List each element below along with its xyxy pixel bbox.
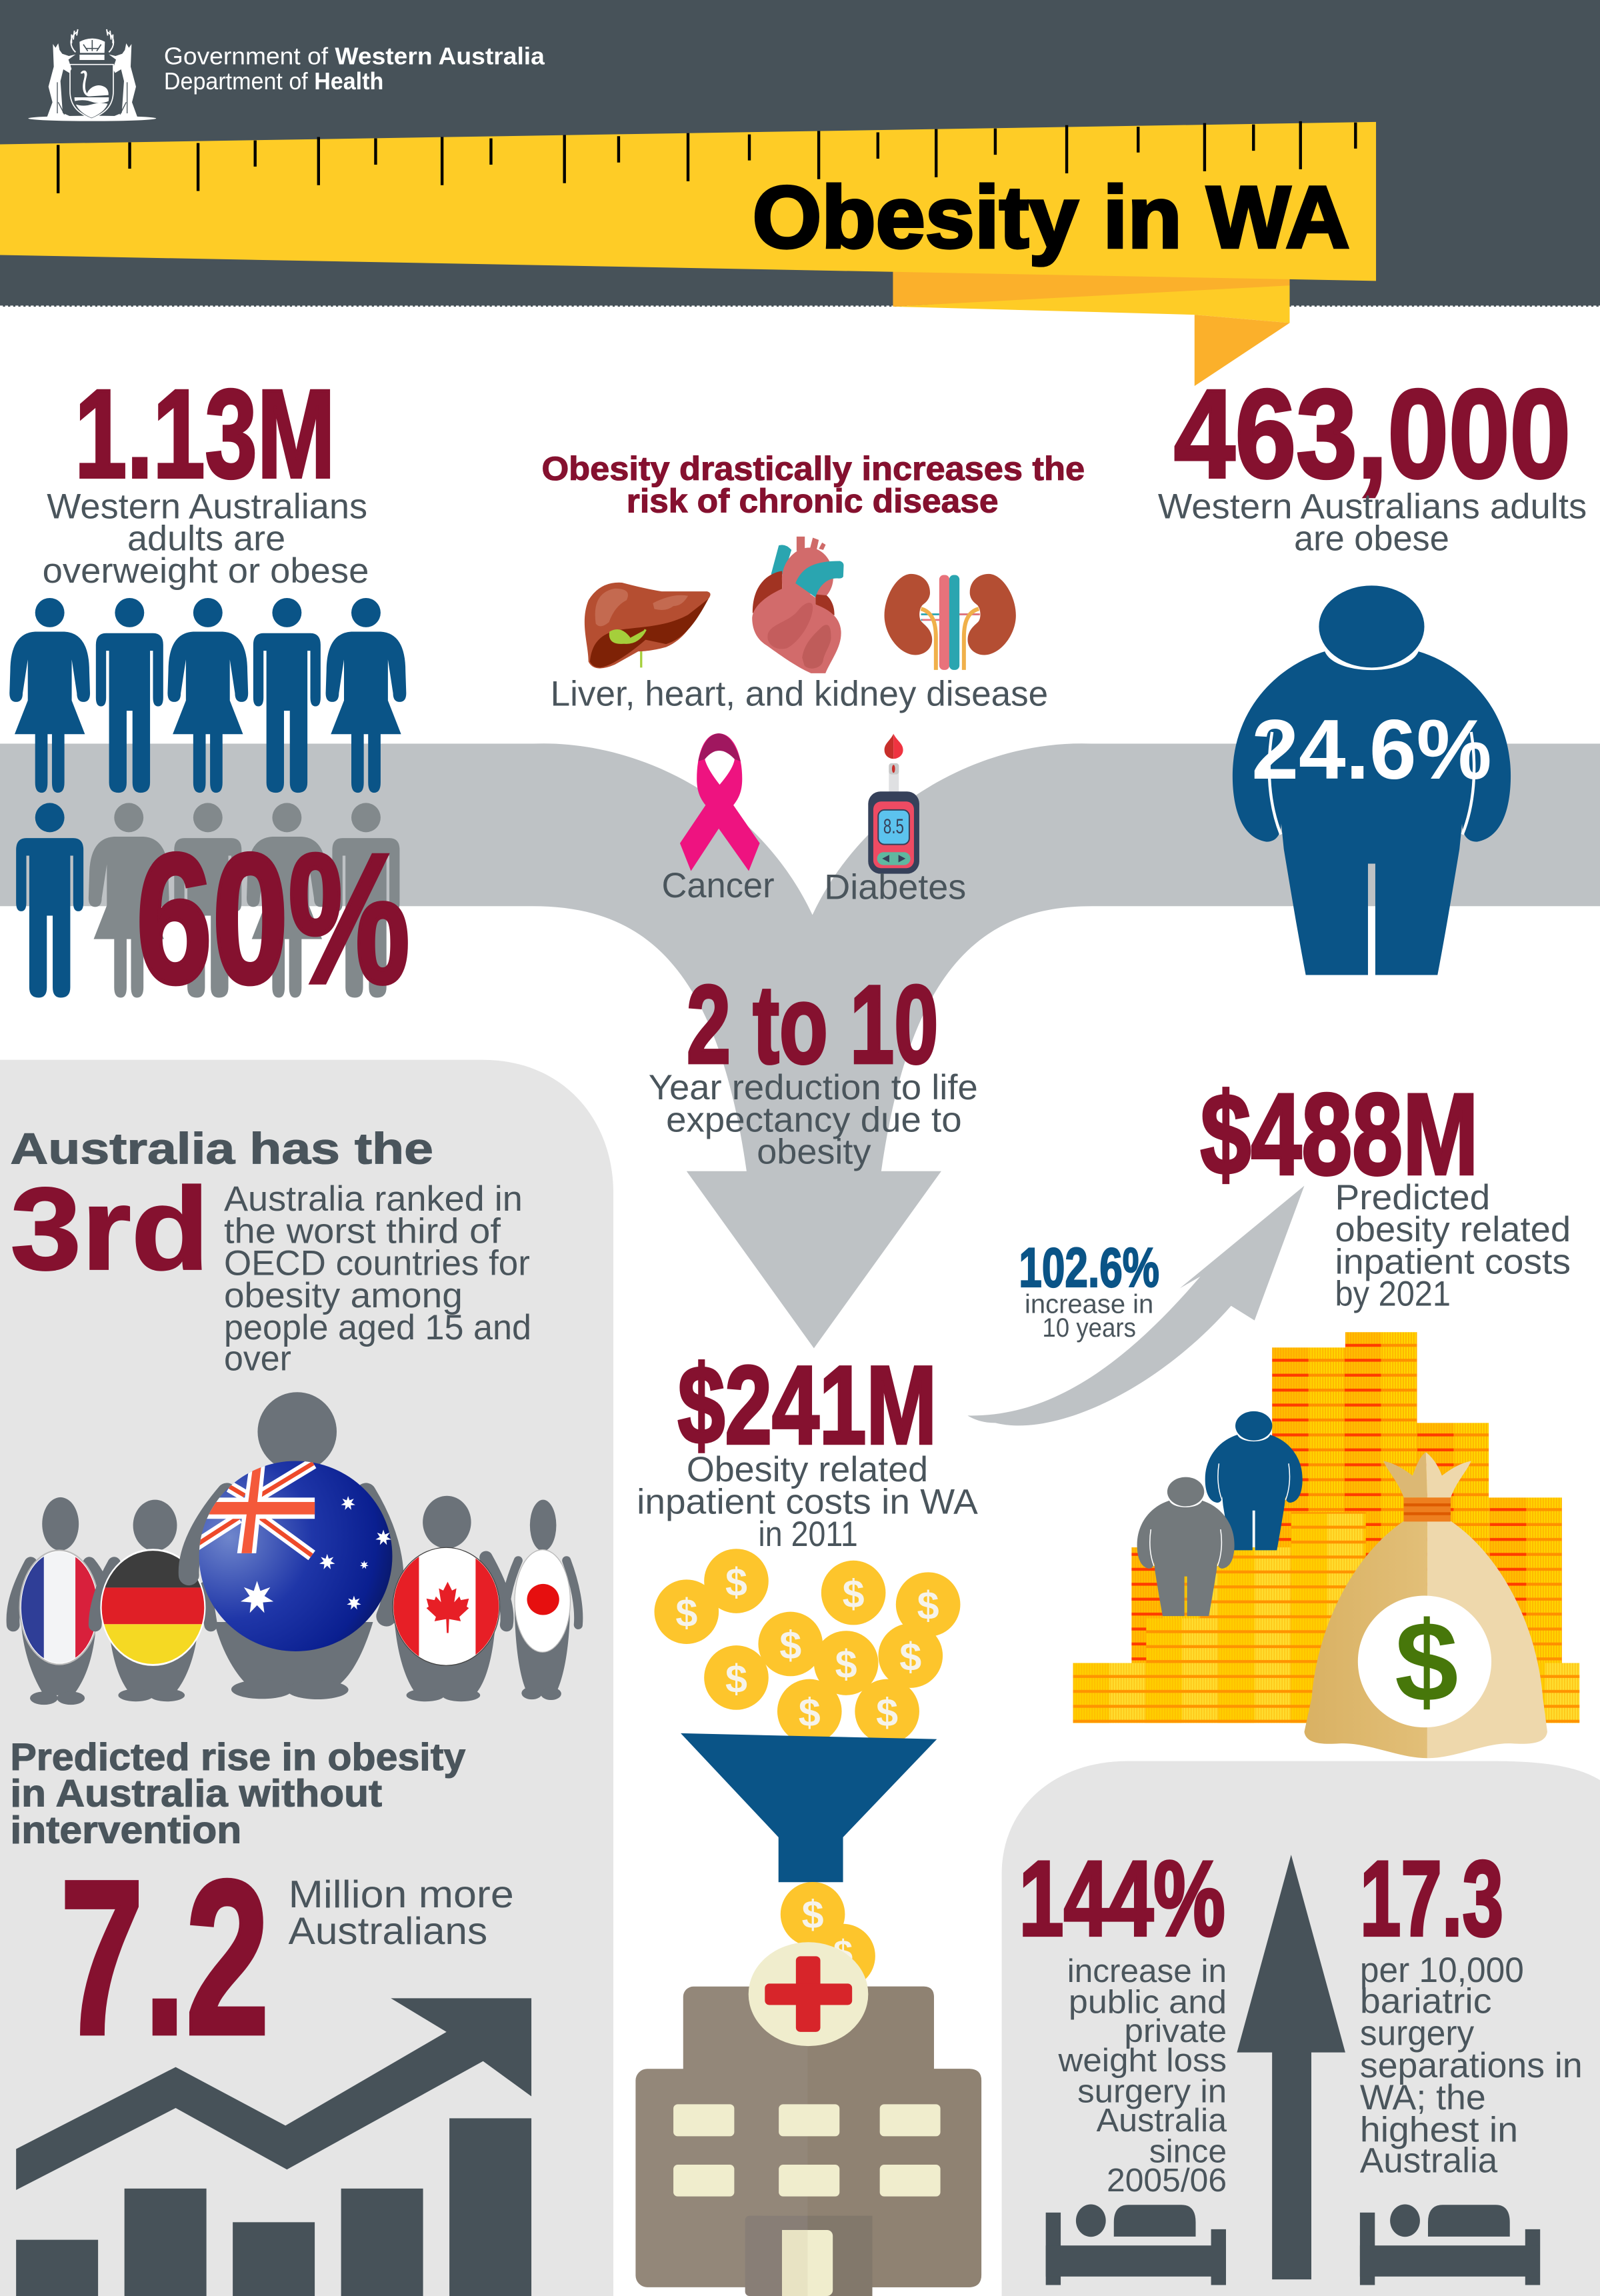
- caption: organs: Liver, heart, and kidney disease: [551, 674, 1048, 713]
- arrow: up: [1237, 1855, 1345, 2279]
- text: bariatric surgery: [1360, 1951, 1583, 2181]
- text: bariatric surgery: separations in: [1360, 2046, 1583, 2085]
- icon: obese person with 24.6%: [1233, 585, 1511, 975]
- stat: 1.13M: overweight or obese: [43, 551, 369, 591]
- caption: cancer: Cancer: [661, 866, 775, 905]
- text: weight loss surgery: [1058, 1953, 1227, 2199]
- icon: falling coins: $: [799, 1690, 821, 1735]
- figure: Australia: [189, 1392, 393, 1699]
- stat: $241M: inpatient costs in WA: [637, 1483, 979, 1522]
- heading: predicted rise: intervention: [10, 1809, 241, 1852]
- text: OECD ranking: OECD countries for: [224, 1244, 530, 1283]
- icon: blue person on coins: [1205, 1411, 1303, 1550]
- icon: falling coins: $: [835, 1641, 857, 1686]
- text: OECD ranking: over: [224, 1339, 291, 1378]
- heading: predicted rise: Predicted rise in obesity: [10, 1736, 466, 1779]
- icon: obese person with 24.6%: 24.6%: [1251, 702, 1492, 797]
- stat: $241M: in 2011: [758, 1515, 858, 1554]
- figure: Canada: [388, 1496, 507, 1701]
- icon: falling coins: $: [843, 1571, 865, 1616]
- heading: predicted rise: [10, 1736, 466, 1852]
- text: OECD ranking: the worst third of: [224, 1211, 501, 1251]
- text: bariatric surgery: surgery: [1360, 2014, 1475, 2053]
- text: million more: Million more: [289, 1873, 514, 1916]
- text: OECD ranking: [224, 1179, 531, 1378]
- arrow: cost growth: [967, 1186, 1304, 1425]
- heading: chronic disease: risk of chronic disease: [627, 482, 999, 520]
- icon: grey person on coins: [1137, 1477, 1235, 1616]
- text: OECD ranking: people aged 15 and: [224, 1308, 531, 1347]
- government name text: Department of Health: [164, 67, 383, 95]
- stat: $488M: inpatient costs: [1335, 1242, 1571, 1281]
- panel: Australia ranking and prediction: [0, 1060, 613, 2296]
- stat: $241M: [637, 1343, 979, 1554]
- stat: 463,000: Western Australians adults: [1158, 487, 1587, 526]
- text: million more: [289, 1873, 514, 1953]
- pictogram: 10 people, 6 highlighted: [9, 598, 406, 997]
- icon: falling coins: $: [917, 1583, 939, 1628]
- stat: $241M: Obesity related: [687, 1450, 928, 1489]
- grey flow arrow merging into down arrow: [0, 743, 1600, 1348]
- icon: cancer ribbon: [680, 733, 760, 871]
- stat: 60%: 60%: [136, 815, 410, 1021]
- icon: falling coins: $: [779, 1623, 801, 1667]
- text: weight loss surgery: 2005/06: [1107, 2162, 1227, 2199]
- stat: 1.13M: 1.13M: [75, 364, 335, 505]
- text: weight loss surgery: weight loss: [1058, 2042, 1227, 2079]
- stat: 102.6%: increase in: [1025, 1290, 1153, 1319]
- icon: kidneys: [885, 574, 1016, 670]
- icon: left bed: [1046, 2205, 1226, 2285]
- stat: 3rd: 3rd: [10, 1164, 209, 1295]
- figure: Germany: [95, 1500, 211, 1701]
- stat: 102.6%: 10 years: [1042, 1313, 1136, 1343]
- stat: 1.13M: Western Australians: [47, 487, 367, 526]
- chart: rising bars and arrow: [16, 1998, 531, 2296]
- icon: right bed: [1360, 2205, 1540, 2285]
- text: bariatric surgery: per 10,000: [1360, 1951, 1524, 1990]
- icon: funnel: [681, 1733, 937, 1882]
- stat: 102.6%: [1019, 1236, 1159, 1343]
- text: bariatric surgery: bariatric: [1360, 1981, 1492, 2021]
- text: weight loss surgery: surgery in: [1077, 2073, 1227, 2109]
- text: bariatric surgery: highest in: [1360, 2111, 1518, 2150]
- stat: life expectancy: expectancy due to: [666, 1100, 962, 1139]
- text: weight loss surgery: public and: [1069, 1983, 1227, 2020]
- icon: money bag: [1304, 1452, 1547, 1758]
- stat: 144%: 144%: [1019, 1839, 1225, 1958]
- icon: falling coins: [655, 1549, 960, 1743]
- icon: heart: [752, 537, 844, 673]
- icon: glucose meter: [868, 734, 919, 874]
- icon: stacks of coins: [1073, 1332, 1579, 1723]
- text: OECD ranking: obesity among: [224, 1276, 463, 1315]
- stat: 463,000: [1158, 364, 1587, 559]
- stat: $488M: by 2021: [1335, 1275, 1451, 1314]
- icon: glucose meter: 8.5: [883, 814, 904, 838]
- icon: hospital: [635, 1942, 981, 2296]
- government name text: [164, 43, 545, 95]
- text: weight loss surgery: Australia: [1097, 2102, 1227, 2139]
- title: Obesity in WA: [753, 168, 1350, 266]
- icon: coins entering hospital: $: [833, 1933, 853, 1973]
- heading: chronic disease: Obesity drastically increases the: [541, 449, 1085, 487]
- text: OECD ranking: Australia ranked in: [224, 1179, 523, 1219]
- stat: life expectancy: obesity: [757, 1133, 871, 1172]
- stat: $488M: $488M: [1201, 1069, 1479, 1199]
- icon: WA coat of arms: [28, 29, 156, 121]
- icon: falling coins: $: [725, 1559, 747, 1604]
- icon: falling coins: $: [899, 1634, 921, 1679]
- figure: France: [13, 1497, 105, 1705]
- heading: chronic disease: [541, 449, 1085, 520]
- stat: 1.13M: adults are: [127, 519, 285, 559]
- panel: surgery statistics: [1002, 1761, 1600, 2296]
- government name text: Government of Western Australia: [164, 43, 545, 70]
- text: bariatric surgery: WA; the: [1360, 2078, 1486, 2117]
- stat: 463,000: are obese: [1294, 519, 1449, 559]
- stat: life expectancy: Year reduction to life: [649, 1068, 978, 1107]
- tape measure ribbon: [0, 121, 1376, 386]
- heading: Australia has the: Australia has the: [10, 1124, 433, 1173]
- text: weight loss surgery: since: [1149, 2133, 1227, 2169]
- text: million more: Australians: [289, 1910, 487, 1953]
- text: weight loss surgery: increase in: [1067, 1953, 1227, 1989]
- stat: life expectancy: 2 to 10: [687, 963, 939, 1087]
- figure: Japan: [505, 1500, 579, 1700]
- text: weight loss surgery: private: [1124, 2013, 1227, 2049]
- stat: life expectancy: [649, 963, 978, 1172]
- stat: 7.2: 7.2: [60, 1835, 269, 2080]
- heading: predicted rise: in Australia without: [10, 1773, 382, 1815]
- icon: coins entering hospital: [781, 1882, 875, 1988]
- header banner: [0, 0, 1600, 307]
- caption: diabetes: Diabetes: [824, 867, 966, 907]
- icon: falling coins: $: [876, 1690, 898, 1735]
- icon: falling coins: $: [675, 1591, 697, 1635]
- icon: coins entering hospital: $: [802, 1892, 824, 1937]
- stat: $488M: Predicted: [1335, 1178, 1490, 1217]
- stat: $241M: $241M: [678, 1343, 937, 1467]
- stat: 1.13M: [43, 364, 369, 591]
- text: bariatric surgery: Australia: [1360, 2141, 1498, 2181]
- stat: 102.6%: 102.6%: [1019, 1236, 1159, 1299]
- icon: falling coins: $: [725, 1656, 747, 1701]
- stat: $488M: [1201, 1069, 1571, 1314]
- stat: 17.3: 17.3: [1360, 1839, 1503, 1958]
- icon: money bag: $: [1395, 1599, 1458, 1726]
- icon: liver: [585, 583, 711, 669]
- stat: $488M: obesity related: [1335, 1210, 1571, 1249]
